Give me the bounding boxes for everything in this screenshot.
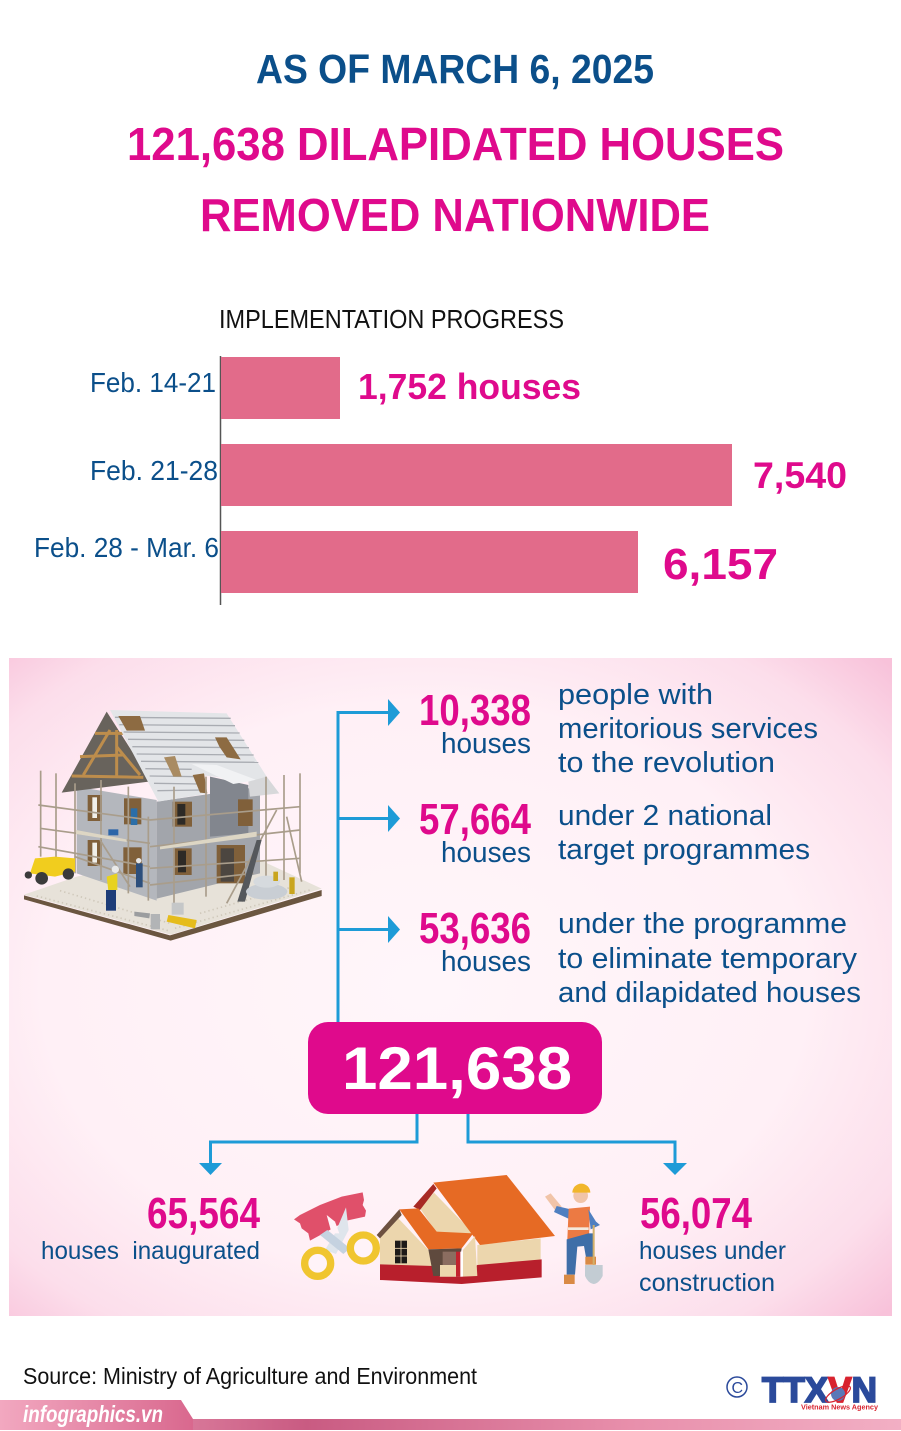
category: meritorious services	[419, 679, 818, 779]
bar: Feb. 28 - Mar. 6: 6,157	[663, 540, 778, 589]
title: REMOVED NATIONWIDE	[200, 189, 710, 241]
icon: ribbon, scissors, finished house, worker	[294, 1175, 603, 1284]
title	[127, 46, 784, 241]
worker	[545, 1184, 603, 1284]
stat: houses under construction: houses under	[639, 1237, 786, 1265]
category: meritorious services: meritorious services	[558, 713, 818, 745]
title: AS OF MARCH 6, 2025	[256, 46, 654, 92]
category: eliminate temporary houses: houses	[441, 946, 531, 978]
scissors	[305, 1207, 376, 1276]
category: eliminate temporary houses: and dilapidated houses	[558, 977, 861, 1009]
category: national target programmes: 57,664	[419, 795, 531, 844]
category: meritorious services: 10,338	[419, 686, 531, 735]
category: eliminate temporary houses	[419, 904, 861, 1009]
category: national target programmes: houses	[441, 837, 531, 869]
arrows: total to status	[199, 1114, 687, 1175]
ribbon	[294, 1192, 366, 1241]
stat: houses inaugurated: 65,564	[147, 1189, 260, 1238]
icon: house under construction	[24, 710, 322, 941]
category: meritorious services: people with	[558, 679, 713, 711]
panel: breakdown	[9, 658, 892, 1316]
total box: 121,638	[342, 1035, 572, 1102]
total box	[308, 1022, 602, 1114]
stat: houses inaugurated	[41, 1189, 260, 1265]
chart heading: IMPLEMENTATION PROGRESS	[219, 304, 564, 334]
stat: houses under construction: 56,074	[640, 1189, 752, 1238]
bar: Feb. 14-21: 1,752 houses	[358, 366, 581, 407]
stat: houses inaugurated: houses inaugurated	[41, 1237, 260, 1265]
title: 121,638 DILAPIDATED HOUSES	[127, 118, 784, 170]
category: national target programmes: under 2 national	[558, 800, 772, 832]
bar chart: implementation progress	[34, 304, 847, 605]
stat: houses under construction	[639, 1189, 786, 1297]
category: national target programmes	[419, 795, 810, 869]
house	[377, 1175, 555, 1284]
bar: Feb. 28 - Mar. 6: Feb. 28 - Mar. 6	[34, 532, 219, 563]
category: eliminate temporary houses: to eliminate temporary	[558, 943, 858, 975]
source: Source: Ministry of Agriculture and Environment	[23, 1363, 478, 1389]
category: eliminate temporary houses: 53,636	[419, 904, 531, 953]
bar: Feb. 14-21	[90, 357, 581, 419]
arrows: bracket to three categories	[338, 699, 400, 1022]
bar: Feb. 21-28: Feb. 21-28	[90, 455, 218, 486]
copyright logo: Vietnam News Agency	[801, 1404, 878, 1412]
bar: Feb. 14-21: Feb. 14-21	[90, 367, 216, 398]
category: meritorious services: houses	[441, 728, 531, 760]
category: national target programmes: target programmes	[558, 834, 810, 866]
footer band: infographics.vn	[23, 1401, 163, 1427]
bar: Feb. 21-28: 7,540	[753, 455, 847, 496]
stat: houses under construction: construction	[639, 1269, 775, 1297]
category: eliminate temporary houses: under the programme	[558, 908, 847, 940]
bar: Feb. 28 - Mar. 6	[34, 531, 778, 593]
copyright logo: C	[732, 1380, 743, 1397]
category: meritorious services: to the revolution	[558, 747, 775, 779]
bar: Feb. 21-28	[90, 444, 847, 506]
footer band	[0, 1400, 901, 1430]
copyright logo: TTXVN	[762, 1371, 877, 1410]
